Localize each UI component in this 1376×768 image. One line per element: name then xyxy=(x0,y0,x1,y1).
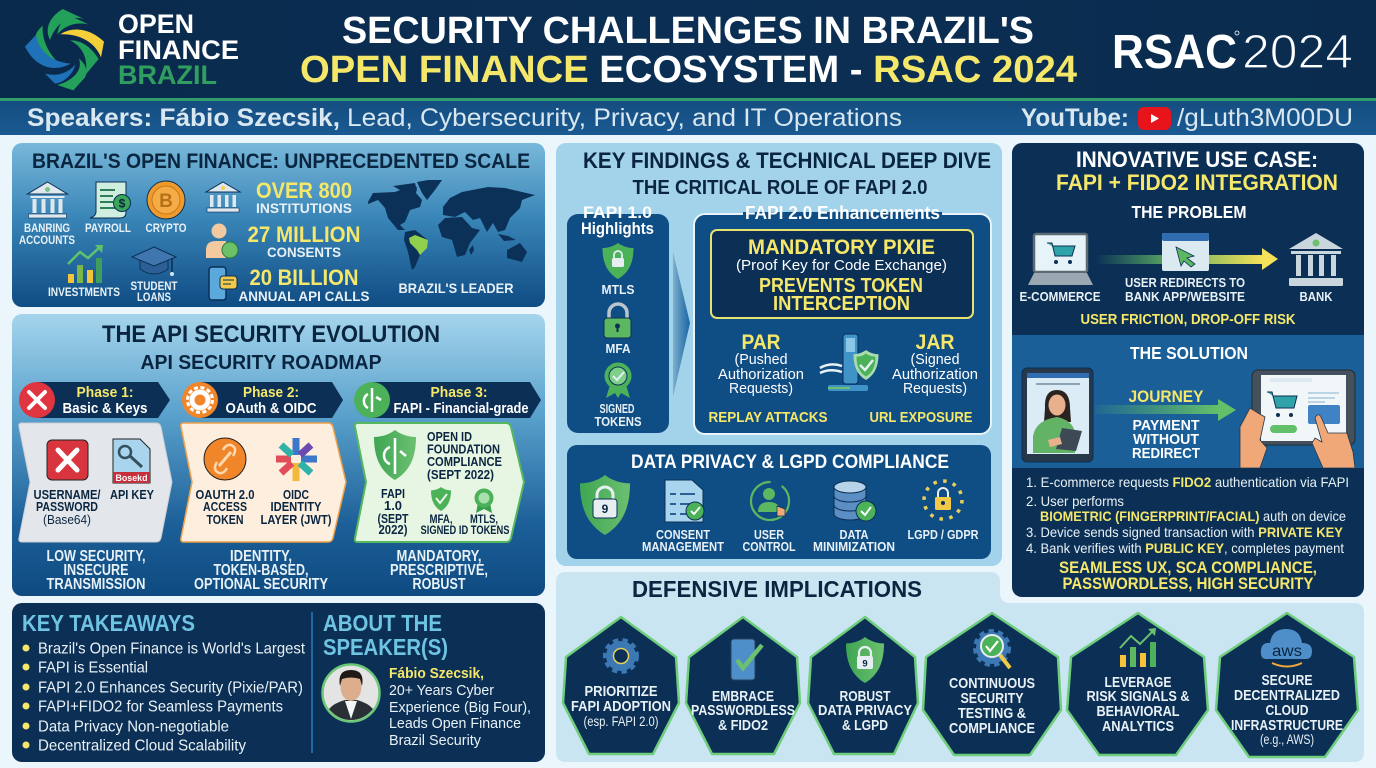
caption: phase 2: IDENTITY, xyxy=(230,548,292,565)
card: continuous testing: TESTING & xyxy=(958,705,1026,722)
box: FAPI 1.0 highlights: SIGNED xyxy=(600,401,634,416)
labels: LAYER (JWT) xyxy=(260,512,332,527)
labels: MANAGEMENT xyxy=(642,540,724,554)
box: data privacy and LGPD compliance xyxy=(567,445,991,559)
speakers strip xyxy=(0,101,1376,135)
caption: phase 3: ROBUST xyxy=(412,576,466,593)
icon: mTLS shield xyxy=(602,243,634,279)
text: FAPI 1.0: FAPI xyxy=(381,486,405,501)
phase 2 banner xyxy=(182,382,343,418)
list: takeaways: Brazil's Open Finance is World's Largest xyxy=(38,640,306,658)
text: compliance: (SEPT 2022) xyxy=(427,467,494,482)
icon: consent management xyxy=(665,480,704,522)
heading: INNOVATIVE USE CASE: xyxy=(1076,147,1318,172)
icon: OIDC star xyxy=(276,438,317,481)
heading: DEFENSIVE IMPLICATIONS xyxy=(632,576,922,602)
list: solution steps: BIOMETRIC (FINGERPRINT/FACIAL) auth on device xyxy=(1040,508,1346,524)
stat: institutions: OVER 800 xyxy=(256,178,352,203)
caption: phase 3: MANDATORY, xyxy=(396,548,482,565)
heading xyxy=(1056,147,1338,195)
label: user redirects: USER REDIRECTS TO xyxy=(1125,275,1245,290)
icon: red X box xyxy=(47,440,88,480)
caption: phase 2 xyxy=(194,548,329,593)
text: PAR xyxy=(718,331,804,397)
text: speaker bio: Experience (Big Four), xyxy=(389,699,531,716)
icon: payroll: $ xyxy=(119,196,126,210)
icon: mTLS medal xyxy=(474,488,494,513)
icon: bank xyxy=(1289,233,1343,286)
subheading: the problem: THE PROBLEM xyxy=(1132,202,1246,222)
icon: LGPD GDPR stars and lock xyxy=(924,481,962,519)
card: secure decentralized cloud: (e.g., AWS) xyxy=(1260,732,1314,747)
RSAC 2024 logo xyxy=(1112,26,1353,79)
caption: phase 1: LOW SECURITY, xyxy=(46,548,146,565)
caption: phase 2: TOKEN-BASED, xyxy=(214,562,308,579)
label: crypto: CRYPTO xyxy=(146,223,187,235)
phase 3 banner: Phase 3: xyxy=(430,385,488,401)
card: embrace passwordless: & FIDO2 xyxy=(718,717,768,734)
speakers strip: /gLuth3M00DU xyxy=(1177,104,1353,132)
icon: YouTube play button xyxy=(1138,107,1171,130)
box: FAPI 1.0 highlights: MTLS xyxy=(602,282,635,297)
label: student loans: LOANS xyxy=(137,292,171,304)
icon: bank xyxy=(28,182,68,218)
heading: THE API SECURITY EVOLUTION xyxy=(102,321,440,348)
list: solution steps: 3. Device sends signed transaction with PRIVATE KEY xyxy=(1026,524,1344,540)
icon: graduation cap xyxy=(132,247,176,276)
callout: benefits xyxy=(1059,559,1317,593)
stat: institutions xyxy=(256,178,352,216)
icon: user control xyxy=(751,482,789,520)
callout: mandatory PIXIE: (Proof Key for Code Exchange) xyxy=(736,257,947,274)
speakers strip: Speakers: Fábio Szecsik, xyxy=(27,104,340,132)
RSAC 2024 logo: 2024 xyxy=(1242,26,1353,79)
icon: gear magnifier xyxy=(976,632,1010,668)
text: FAPI 1.0: (SEPT xyxy=(378,511,409,526)
card: prioritize FAPI adoption: (esp. FAPI 2.0) xyxy=(584,714,658,729)
arrow: journey xyxy=(1095,399,1236,421)
label: URL exposure: URL EXPOSURE xyxy=(870,409,972,426)
speakers strip: Lead, Cybersecurity, Privacy, and IT Operations xyxy=(347,104,902,132)
label: replay attacks: REPLAY ATTACKS xyxy=(708,409,828,426)
icon: privacy shield xyxy=(580,475,630,535)
card: secure decentralized cloud: CLOUD xyxy=(1266,702,1309,719)
heading: key takeaways: KEY TAKEAWAYS xyxy=(22,610,195,636)
card: leverage risk signals: ANALYTICS xyxy=(1102,718,1174,735)
card: robust data privacy: DATA PRIVACY xyxy=(818,702,912,719)
text: JAR: (Signed xyxy=(910,351,960,368)
labels: PASSWORD xyxy=(36,499,98,514)
icon: phone check xyxy=(731,639,762,680)
caption: phase 2: OPTIONAL SECURITY xyxy=(194,576,329,593)
card: secure decentralized cloud: SECURE xyxy=(1262,672,1312,689)
labels: (Base64) xyxy=(43,512,91,527)
caption: phase 1 xyxy=(46,548,146,593)
list: takeaways: Decentralized Cloud Scalability xyxy=(38,738,246,754)
card: secure decentralized cloud: INFRASTRUCTURE xyxy=(1231,717,1343,734)
card: robust data privacy: & LGPD xyxy=(842,717,888,734)
icon: API key file: Bosekd xyxy=(116,473,148,484)
label: banking accounts xyxy=(19,223,75,247)
caption: phase 1: TRANSMISSION xyxy=(46,576,146,593)
card: leverage risk signals: BEHAVIORAL xyxy=(1096,703,1180,720)
callout: mandatory PIXIE: MANDATORY PIXIE xyxy=(748,236,935,259)
card: embrace passwordless: EMBRACE xyxy=(712,688,774,705)
list: solution steps xyxy=(1026,474,1349,556)
list: takeaways: FAPI 2.0 Enhances Security (Pixie/PAR) xyxy=(38,680,303,696)
text: speaker bio: Brazil Security xyxy=(389,732,481,749)
arrow: redirect journey xyxy=(1095,248,1278,270)
labels: IDENTITY xyxy=(270,499,322,514)
labels: CONTROL xyxy=(742,540,796,554)
panel: API security evolution xyxy=(12,314,545,596)
icon: crypto coin xyxy=(147,181,185,219)
text: speaker bio: 20+ Years Cyber xyxy=(389,682,494,699)
card: secure decentralized cloud: DECENTRALIZED xyxy=(1234,687,1340,704)
logo: Open Finance Brazil: FINANCE xyxy=(118,35,239,65)
icon: MFA shield xyxy=(431,487,451,511)
stat: API calls: ANNUAL API CALLS xyxy=(238,288,370,304)
text: PAR: (Pushed xyxy=(734,351,788,368)
heading: about the speaker xyxy=(323,610,448,660)
icon: person consent xyxy=(206,224,238,258)
labels: LGPD / GDPR xyxy=(908,528,978,542)
card: secure decentralized cloud xyxy=(1216,613,1358,757)
logo: Open Finance Brazil: BRAZIL xyxy=(118,60,217,90)
card: prioritize FAPI adoption xyxy=(563,617,679,754)
card: robust data privacy xyxy=(808,617,918,754)
text: FAPI 1.0 xyxy=(378,486,409,537)
card: robust data privacy: ROBUST xyxy=(840,688,890,705)
callout: mandatory PIXIE: PREVENTS TOKEN xyxy=(759,275,923,297)
label: payroll: PAYROLL xyxy=(85,223,131,235)
labels: MTLS, xyxy=(470,512,498,526)
icon: data minimization xyxy=(834,481,876,521)
box: FAPI 1.0 highlights: MFA xyxy=(606,341,631,356)
icon: OAuth chain xyxy=(204,438,246,480)
heading xyxy=(583,148,991,199)
labels: OIDC xyxy=(283,487,309,502)
box: FAPI 1.0 highlights: FAPI 1.0 xyxy=(583,203,652,222)
labels: TOKEN xyxy=(206,512,244,527)
label: user redirects: BANK APP/WEBSITE xyxy=(1125,289,1245,304)
icon: shield lock: 9 xyxy=(862,658,868,670)
header banner xyxy=(0,0,1376,101)
box: FAPI 1.0 highlights xyxy=(567,203,669,433)
labels: OAUTH 2.0 xyxy=(196,487,254,502)
text: speaker bio: Fábio Szecsik, xyxy=(389,665,484,682)
list: solution steps: 4. Bank verifies with PUBLIC KEY, completes payment xyxy=(1026,540,1344,556)
label: investments: INVESTMENTS xyxy=(48,287,120,299)
text: speaker bio xyxy=(389,665,531,749)
heading: FAPI + FIDO2 INTEGRATION xyxy=(1056,170,1338,195)
label: Brazil's leader: BRAZIL'S LEADER xyxy=(398,280,514,296)
stat: consents: CONSENTS xyxy=(267,244,341,260)
stat: consents: 27 MILLION xyxy=(248,222,360,247)
text: compliance: COMPLIANCE xyxy=(427,454,502,469)
text: journey payment: WITHOUT xyxy=(1133,431,1199,448)
icon: FAPI shield xyxy=(374,430,416,480)
card: prioritize FAPI adoption: FAPI ADOPTION xyxy=(571,698,671,715)
caption: phase 1: INSECURE xyxy=(64,562,128,579)
card: leverage risk signals: RISK SIGNALS & xyxy=(1086,688,1190,705)
subheading: the solution: THE SOLUTION xyxy=(1130,343,1248,363)
arrow: FAPI 1.0 to FAPI 2.0 xyxy=(673,252,690,397)
text: journey payment: REDIRECT xyxy=(1132,445,1200,462)
card: continuous testing xyxy=(923,613,1061,755)
label: bank: BANK xyxy=(1300,289,1333,304)
logo: Open Finance Brazil: OPEN xyxy=(118,9,194,39)
labels xyxy=(642,528,978,554)
labels: MFA, xyxy=(430,512,452,526)
heading: THE CRITICAL ROLE OF FAPI 2.0 xyxy=(632,177,928,199)
photo: speaker portrait xyxy=(322,664,380,722)
heading: about the speaker: ABOUT THE xyxy=(323,610,442,636)
callout: mandatory PIXIE xyxy=(711,230,973,318)
labels xyxy=(420,512,510,537)
text: PAR: Requests) xyxy=(729,380,793,397)
card: leverage risk signals xyxy=(1067,613,1208,755)
text: PAR: PAR xyxy=(742,331,780,354)
logo: Open Finance Brazil xyxy=(25,9,239,90)
labels: USER xyxy=(754,528,784,542)
phase 2 banner: OAuth & OIDC xyxy=(226,401,317,417)
illustration: woman with tablet xyxy=(1022,368,1093,462)
icon: growth chart xyxy=(1120,628,1156,667)
heading xyxy=(102,321,440,374)
box: FAPI 1.0 highlights: Highlights xyxy=(581,219,654,238)
list: solution steps: 2. User performs xyxy=(1026,493,1124,509)
icon: MFA lock xyxy=(604,304,631,338)
labels: MINIMIZATION xyxy=(813,540,895,554)
text: compliance xyxy=(427,429,502,482)
panel: innovative use case xyxy=(1012,143,1364,597)
icon: crypto coin: B xyxy=(159,191,173,212)
caption: phase 3: PRESCRIPTIVE, xyxy=(390,562,488,579)
icon: browser window xyxy=(1162,233,1209,271)
box: data privacy and LGPD compliance: DATA PRIVACY & LGPD COMPLIANCE xyxy=(631,452,949,473)
icon: request and shield device xyxy=(820,334,878,391)
text: compliance: FOUNDATION xyxy=(427,442,500,456)
phase 1 banner: Phase 1: xyxy=(76,385,134,401)
label: banking accounts: BANRING xyxy=(24,223,70,235)
phase 1 banner xyxy=(19,382,170,418)
text: compliance: OPEN ID xyxy=(427,429,472,444)
callout: benefits: PASSWORDLESS, HIGH SECURITY xyxy=(1062,575,1314,593)
heading: KEY FINDINGS & TECHNICAL DEEP DIVE xyxy=(583,148,991,173)
box: FAPI 2.0 enhancements: FAPI 2.0 Enhancements xyxy=(745,203,940,223)
phase 2 banner: Phase 2: xyxy=(243,385,299,401)
heading: BRAZIL'S OPEN FINANCE: UNPRECEDENTED SCALE xyxy=(32,150,530,173)
card: phase 2 xyxy=(181,423,346,542)
heading: API SECURITY ROADMAP xyxy=(140,352,382,374)
card: leverage risk signals: LEVERAGE xyxy=(1104,674,1172,691)
phase 1 banner: Basic & Keys xyxy=(62,401,148,417)
list: takeaways: FAPI+FIDO2 for Seamless Payments xyxy=(38,698,283,716)
text: JAR: JAR xyxy=(916,331,954,354)
stat: institutions: INSTITUTIONS xyxy=(256,200,352,216)
labels: ACCESS xyxy=(203,499,247,514)
label: e-commerce: E-COMMERCE xyxy=(1020,289,1101,304)
illustration: hands holding tablet xyxy=(1240,370,1355,468)
speakers strip: YouTube: xyxy=(1021,104,1129,132)
text: JAR xyxy=(892,331,978,397)
card: embrace passwordless: PASSWORDLESS xyxy=(691,702,795,719)
stat: API calls xyxy=(238,265,370,304)
callout: mandatory PIXIE: INTERCEPTION xyxy=(773,293,910,315)
title: OPEN FINANCE ECOSYSTEM - RSAC 2024 xyxy=(300,49,1077,91)
callout: user friction: USER FRICTION, DROP-OFF RISK xyxy=(1080,312,1296,328)
card: phase 3 xyxy=(355,423,524,542)
title xyxy=(300,10,1077,91)
text: journey payment: PAYMENT xyxy=(1132,417,1200,434)
list: takeaways: Data Privacy Non-negotiable xyxy=(38,718,229,736)
card: continuous testing: CONTINUOUS xyxy=(949,675,1035,692)
labels: API KEY xyxy=(110,487,154,502)
text: journey payment xyxy=(1128,387,1204,462)
label: student loans xyxy=(130,281,178,304)
heading: about the speaker: SPEAKER(S) xyxy=(323,634,448,660)
card: phase 1 xyxy=(19,423,172,542)
labels xyxy=(196,487,332,527)
icon: gear target xyxy=(606,641,636,671)
panel: defensive implications xyxy=(556,572,1364,762)
phase 3 banner: FAPI - Financial-grade xyxy=(394,401,528,417)
icon: institutions bank xyxy=(206,182,240,212)
title: SECURITY CHALLENGES IN BRAZIL'S xyxy=(342,10,1034,52)
box: FAPI 1.0 highlights: TOKENS xyxy=(594,414,642,429)
label: student loans: STUDENT xyxy=(130,281,178,293)
card: embrace passwordless xyxy=(686,617,800,754)
list: solution steps: 1. E-commerce requests FIDO2 authentication via FAPI xyxy=(1026,474,1349,490)
icon: laptop e-commerce xyxy=(1028,234,1093,285)
labels: CONSENT xyxy=(656,528,710,542)
icon: investments chart xyxy=(68,245,103,283)
icon: signed tokens medal xyxy=(604,362,632,398)
labels: DATA xyxy=(840,528,868,542)
icon: AWS cloud xyxy=(1261,629,1312,666)
phase 3 banner xyxy=(354,382,541,418)
list: takeaways xyxy=(22,640,306,754)
icon: payroll xyxy=(90,182,130,218)
card: prioritize FAPI adoption: PRIORITIZE xyxy=(584,683,658,700)
panel: key takeaways and about the speaker xyxy=(12,603,545,762)
icon: privacy shield: 9 xyxy=(602,502,609,516)
stat: API calls: 20 BILLION xyxy=(250,265,358,290)
text: JAR: Authorization xyxy=(892,366,978,383)
RSAC 2024 logo: RSAC xyxy=(1112,26,1237,79)
box: FAPI 2.0 enhancements xyxy=(694,203,991,434)
icon: API key file xyxy=(113,439,150,484)
label: user redirects xyxy=(1125,275,1245,304)
text: JAR: Requests) xyxy=(903,380,967,397)
text: FAPI 1.0: 2022) xyxy=(378,522,408,537)
map: world with Brazil highlighted xyxy=(368,180,535,270)
card: continuous testing: SECURITY xyxy=(960,690,1024,707)
labels xyxy=(34,487,154,527)
text: FAPI 1.0: 1.0 xyxy=(384,498,402,513)
labels: USERNAME/ xyxy=(34,487,101,502)
stat: consents xyxy=(248,222,360,260)
caption: phase 3 xyxy=(390,548,488,593)
text: PAR: Authorization xyxy=(718,366,804,383)
text: journey payment: JOURNEY xyxy=(1128,387,1204,406)
list: takeaways: FAPI is Essential xyxy=(38,660,148,676)
icon: phone API xyxy=(209,267,237,300)
labels: SIGNED ID TOKENS xyxy=(420,523,510,537)
callout: benefits: SEAMLESS UX, SCA COMPLIANCE, xyxy=(1059,559,1317,577)
icon: AWS cloud: aws xyxy=(1272,643,1302,660)
text: speaker bio: Leads Open Finance xyxy=(389,715,521,732)
panel: key findings and technical deep dive xyxy=(556,143,1002,566)
label: banking accounts: ACCOUNTS xyxy=(19,235,75,247)
card: continuous testing: COMPLIANCE xyxy=(949,720,1035,737)
panel: Brazil's Open Finance scale xyxy=(12,143,545,307)
